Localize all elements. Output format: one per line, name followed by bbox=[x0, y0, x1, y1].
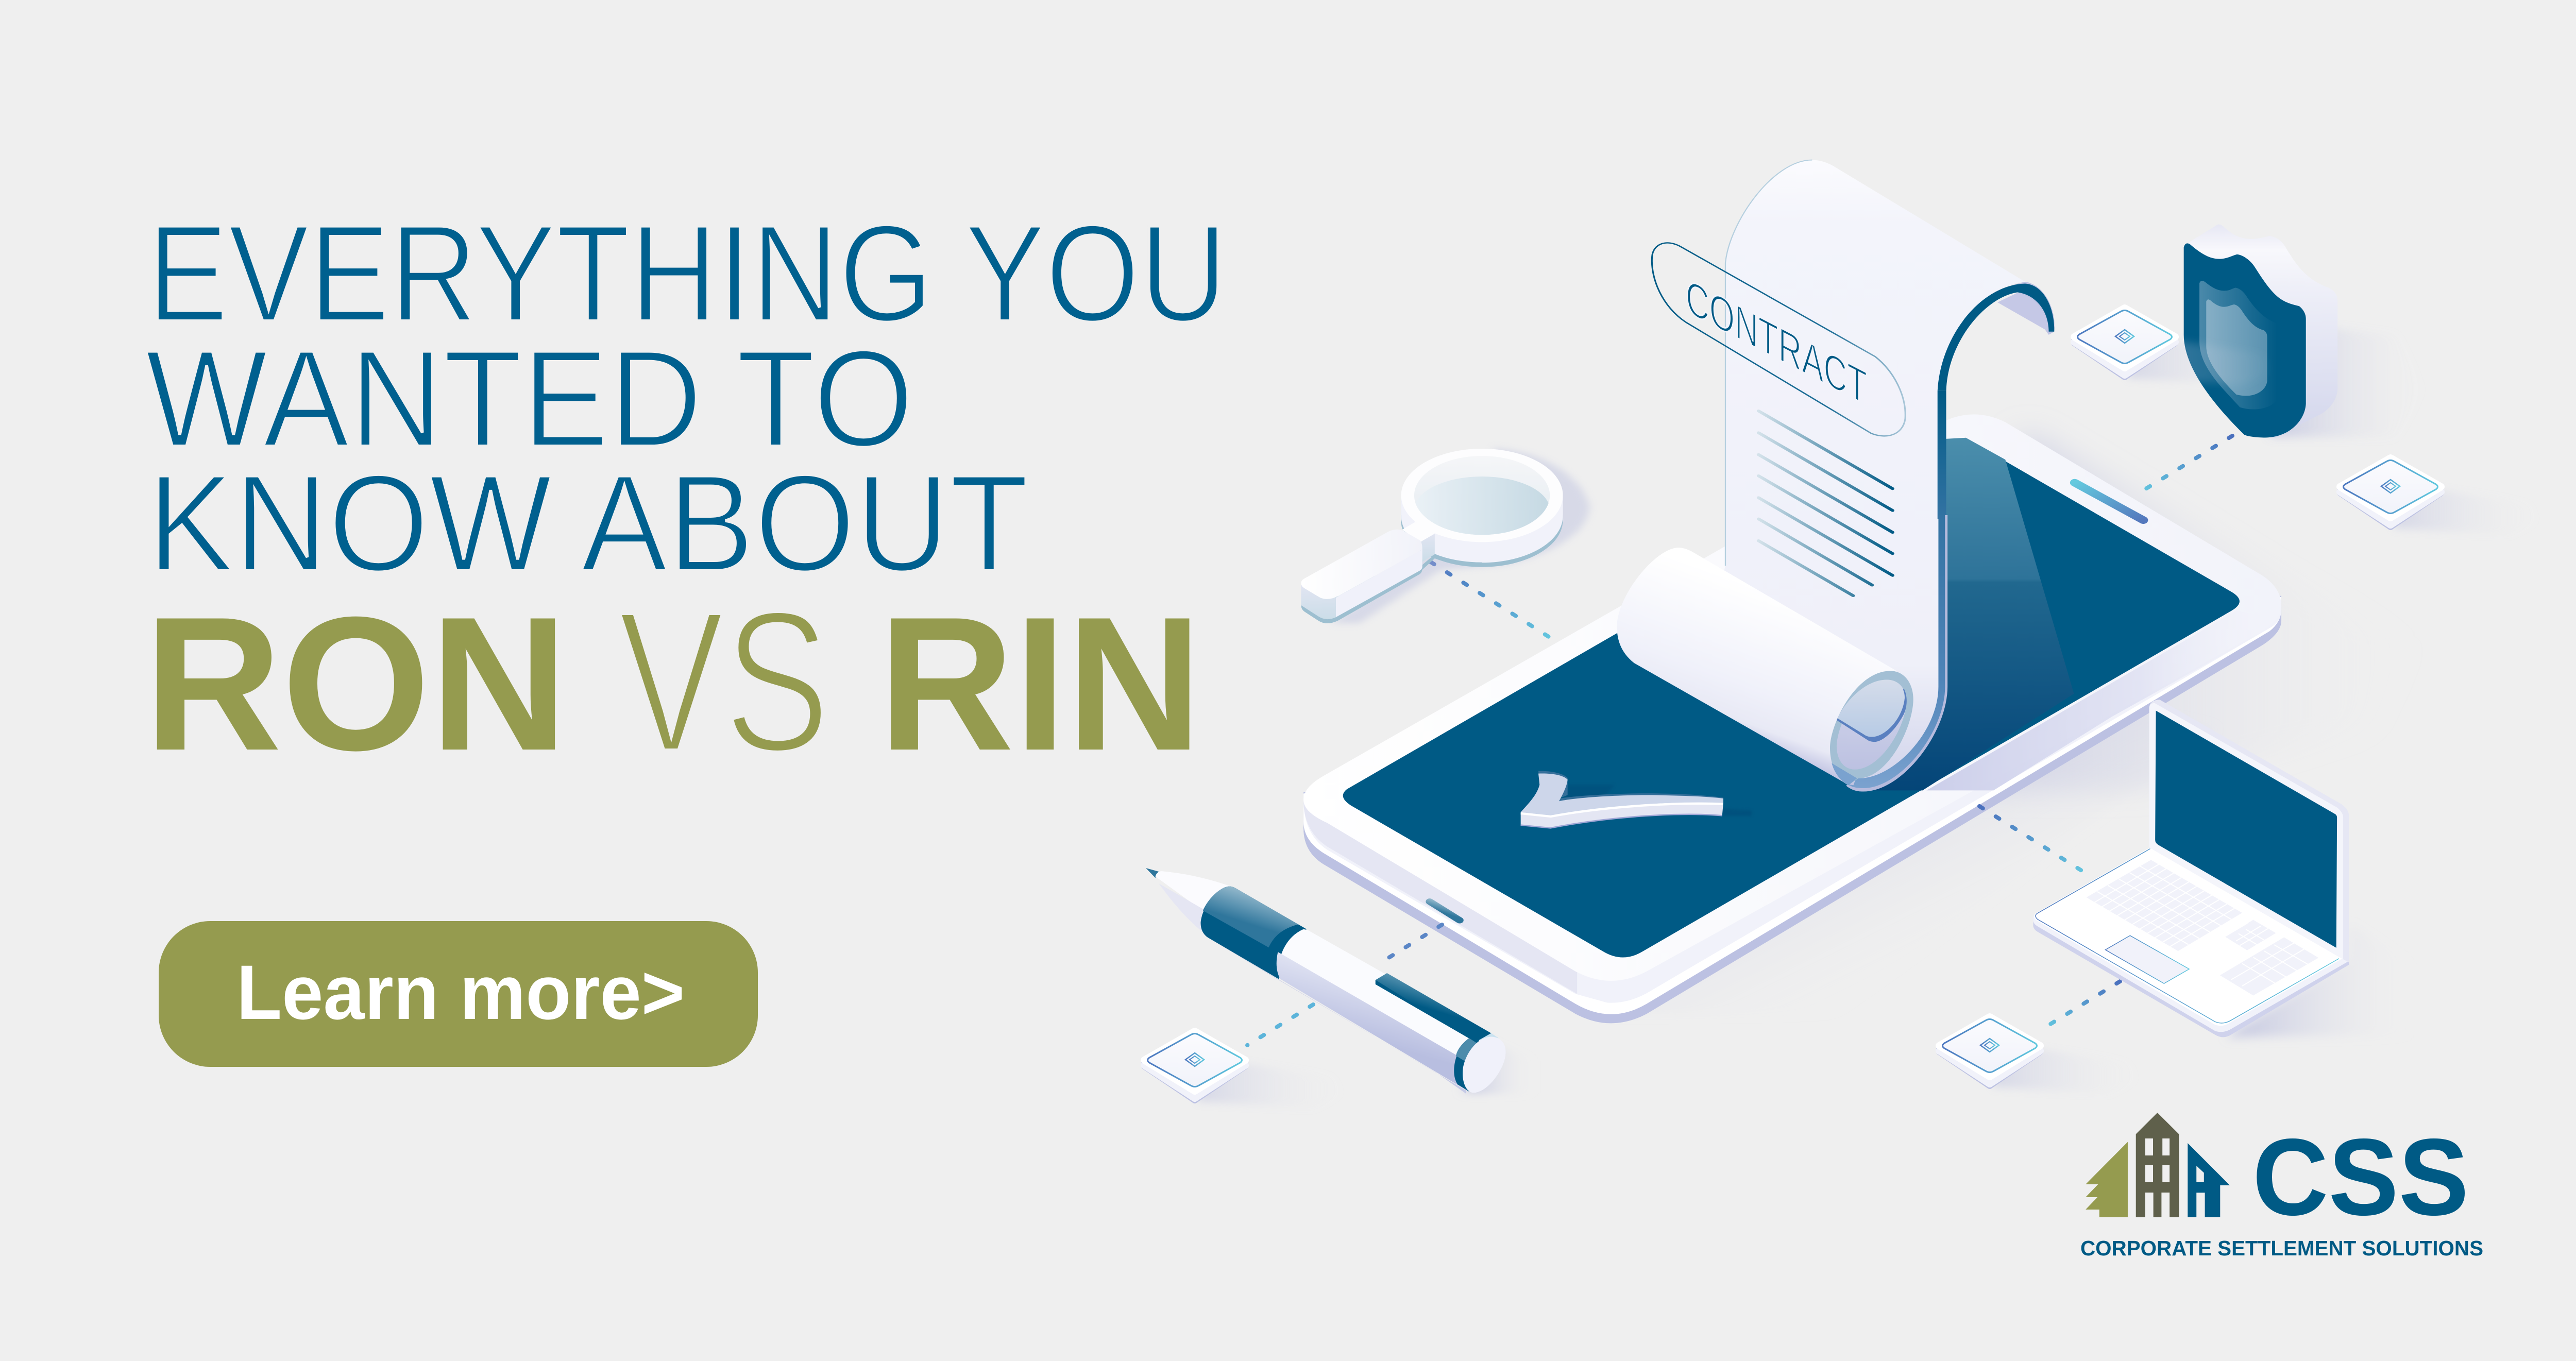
heading: RON vs RIN bbox=[144, 569, 1202, 794]
chip: right bbox=[2340, 457, 2540, 535]
heading: RON vs RIN: RON bbox=[144, 577, 568, 790]
roll end ring bbox=[1830, 671, 1913, 785]
heading: RON vs RIN: RIN bbox=[878, 577, 1202, 790]
heading: RON vs RIN: VS bbox=[618, 569, 830, 794]
logo wordmark: CSS bbox=[2252, 1116, 2469, 1238]
icon: check mark bbox=[1521, 771, 1752, 828]
chip: near shield bbox=[2074, 308, 2274, 385]
contract word: CONTRACT bbox=[1686, 268, 1867, 416]
banner canvas bbox=[147, 160, 2482, 1256]
roll body bbox=[1617, 548, 1896, 785]
icon: shield bbox=[2184, 225, 2424, 438]
button: learn more: Learn more> bbox=[236, 949, 685, 1035]
contract label outline bbox=[1652, 243, 1905, 436]
keyboard bbox=[2087, 860, 2318, 995]
connector dots bbox=[1247, 436, 2232, 1045]
icon: magnifier bbox=[1301, 448, 1589, 623]
home slot bbox=[1430, 901, 1460, 920]
curl rim bbox=[1846, 515, 1947, 792]
chip: near pen bbox=[1144, 1031, 1344, 1108]
speaker bbox=[2075, 483, 2143, 520]
title: KNOW ABOUT bbox=[147, 446, 1029, 600]
icon: pen bbox=[1146, 868, 1532, 1094]
contract text lines bbox=[1758, 411, 1892, 596]
roll and lower curl bbox=[1617, 515, 1947, 792]
trackpad bbox=[2106, 935, 2189, 983]
screen reflection bbox=[1867, 438, 2074, 790]
title bbox=[145, 196, 1227, 600]
logo bbox=[2080, 1113, 2483, 1260]
pen clip bbox=[1376, 973, 1491, 1044]
button: learn more bbox=[159, 921, 758, 1067]
illustration: phone bbox=[1303, 414, 2412, 1023]
title: WANTED TO bbox=[145, 321, 914, 475]
icon: laptop bbox=[2033, 700, 2413, 1037]
icon: contract scroll bbox=[1617, 160, 2055, 792]
sheet right edge bbox=[1938, 391, 1946, 519]
chip: near laptop bbox=[1939, 1016, 2139, 1094]
logo tagline: CORPORATE SETTLEMENT SOLUTIONS bbox=[2080, 1236, 2483, 1260]
logo mark bbox=[2086, 1113, 2230, 1217]
title: EVERYTHING YOU bbox=[147, 196, 1227, 350]
